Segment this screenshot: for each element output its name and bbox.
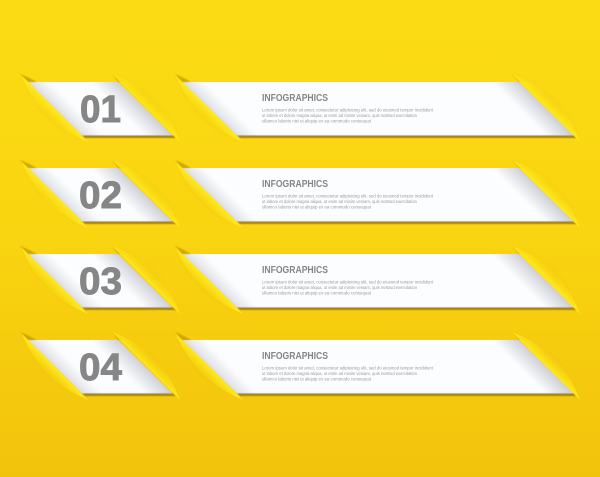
- left flap: [176, 334, 243, 400]
- body text: Lorem ipsum dolor sit amet, consectetur adipisicing elit, sed do eiusmod tempor incididunt: [262, 108, 434, 112]
- left flap: [176, 162, 243, 228]
- right flap: [112, 74, 180, 142]
- heading: INFOGRAPHICS: [262, 351, 328, 362]
- left flap: [176, 248, 243, 314]
- left flap: [22, 334, 88, 400]
- right flap: [512, 246, 580, 314]
- body text: ut labore et dolore magna aliqua, ut enim ad minim veniam, quis nostrud exercitation: [262, 113, 417, 118]
- number: 01: [80, 89, 121, 131]
- heading: INFOGRAPHICS: [262, 179, 328, 190]
- body text: ullamco laboris nisi ut aliquip ex ea commodo consequat: [262, 290, 372, 296]
- body text: ullamco laboris nisi ut aliquip ex ea commodo consequat: [262, 376, 372, 382]
- right flap: [512, 332, 580, 400]
- content tab 2: [175, 160, 580, 228]
- number: 02: [79, 175, 122, 217]
- number tab 02: [20, 160, 180, 228]
- body text: ullamco laboris nisi ut aliquip ex ea commodo consequat: [262, 118, 372, 124]
- body text: Lorem ipsum dolor sit amet, consectetur adipisicing elit, sed do eiusmod tempor incididunt: [262, 366, 434, 370]
- left flap: [22, 76, 88, 142]
- right flap: [512, 74, 580, 142]
- row 3: [20, 246, 580, 314]
- number: 03: [79, 261, 122, 303]
- body text: Lorem ipsum dolor sit amet, consectetur adipisicing elit, sed do eiusmod tempor incididunt: [262, 280, 434, 284]
- body text: ut labore et dolore magna aliqua, ut enim ad minim veniam, quis nostrud exercitation: [262, 199, 417, 204]
- number tab 04: [20, 332, 180, 400]
- right flap: [112, 246, 180, 314]
- body text: Lorem ipsum dolor sit amet, consectetur adipisicing elit, sed do eiusmod tempor incididunt: [262, 194, 434, 198]
- left flap: [22, 248, 88, 314]
- body text: [262, 280, 434, 296]
- content tab 1: [175, 74, 580, 142]
- content tab 3: [175, 246, 580, 314]
- heading: INFOGRAPHICS: [262, 93, 328, 104]
- body text: ut labore et dolore magna aliqua, ut enim ad minim veniam, quis nostrud exercitation: [262, 371, 417, 376]
- left flap: [22, 162, 88, 228]
- number tab 03: [20, 246, 180, 314]
- row 2: [20, 160, 580, 228]
- body text: ut labore et dolore magna aliqua, ut enim ad minim veniam, quis nostrud exercitation: [262, 285, 417, 290]
- body text: [262, 366, 434, 382]
- right flap: [112, 160, 180, 228]
- heading: INFOGRAPHICS: [262, 265, 328, 276]
- body text: [262, 108, 434, 124]
- left flap: [176, 76, 243, 142]
- row 1: [20, 74, 580, 142]
- number: 04: [79, 347, 122, 389]
- body text: ullamco laboris nisi ut aliquip ex ea commodo consequat: [262, 204, 372, 210]
- right flap: [512, 160, 580, 228]
- number tab 01: [20, 74, 180, 142]
- body text: [262, 194, 434, 210]
- row 4: [20, 332, 580, 400]
- right flap: [112, 332, 180, 400]
- content tab 4: [175, 332, 580, 400]
